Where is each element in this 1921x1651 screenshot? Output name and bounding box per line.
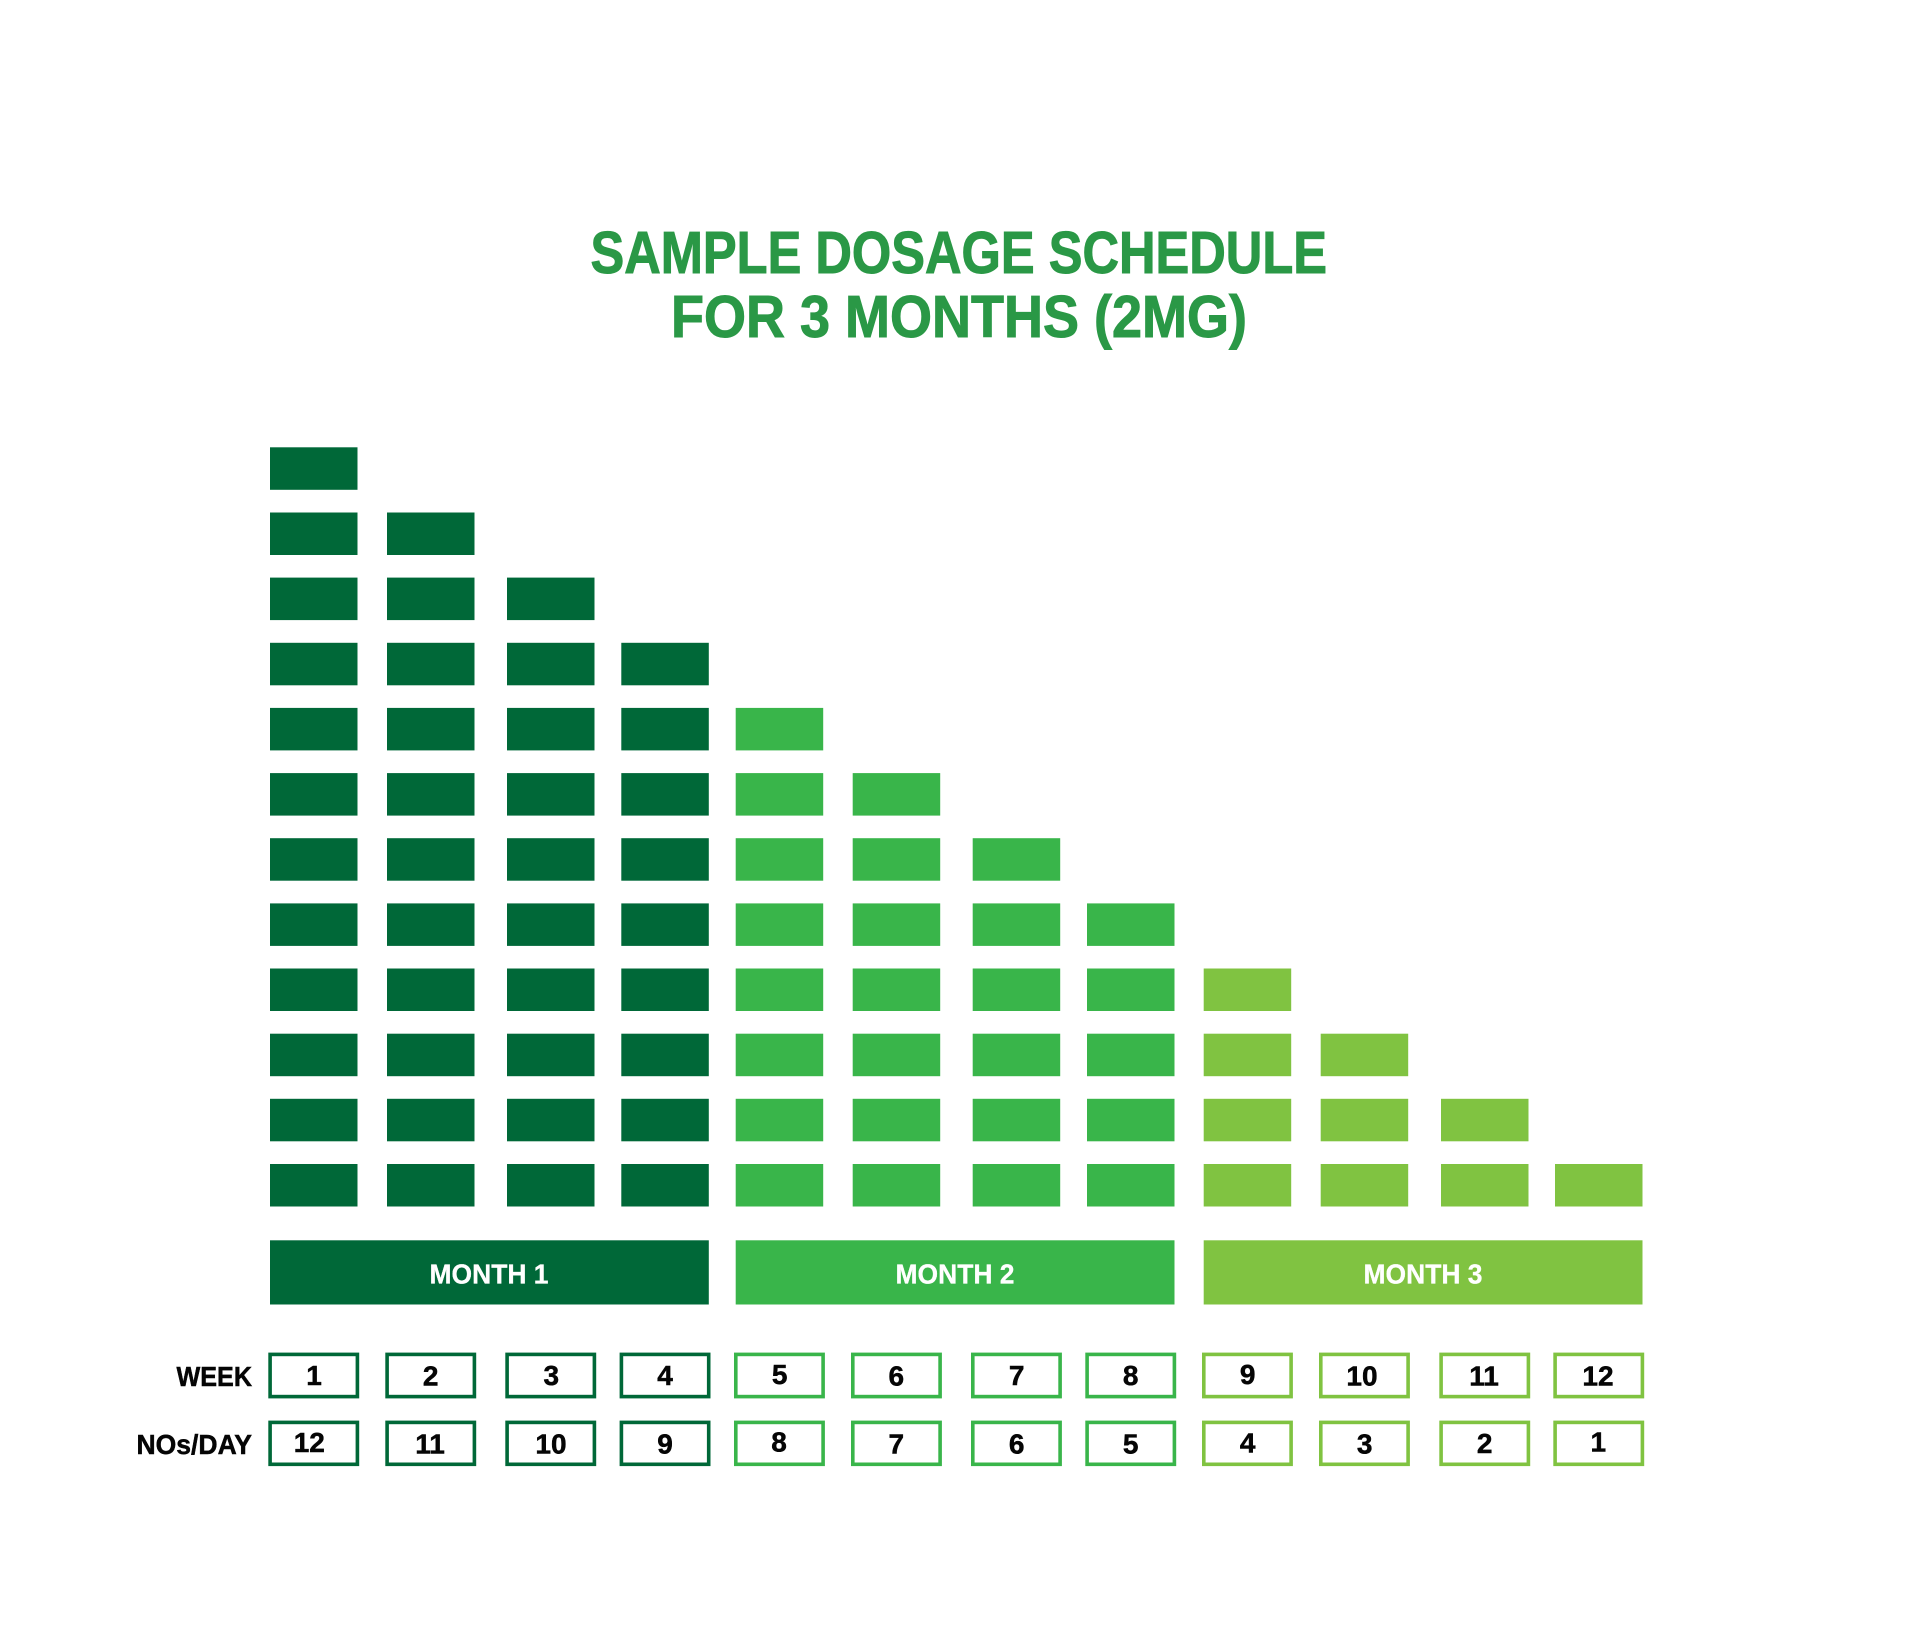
week 4 column: 9 blocks: [621, 643, 709, 1206]
numbers per day row: 9: [657, 1428, 673, 1459]
week 11 column: 2 blocks: [1441, 1099, 1528, 1206]
week number row: 11: [1469, 1360, 1499, 1392]
title: FOR 3 MONTHS (2MG): [671, 284, 1247, 350]
week 7 column: 6 blocks: [973, 838, 1060, 1206]
week number row: 7: [1009, 1360, 1024, 1391]
week number row: 8: [1123, 1360, 1138, 1391]
numbers per day row: [270, 1422, 1642, 1464]
week number row: 1: [306, 1360, 322, 1391]
week number row: 9: [1240, 1359, 1255, 1390]
row label: numbers per day: NOs/DAY: [136, 1429, 252, 1460]
month 1 banner: MONTH 1: [430, 1258, 548, 1290]
numbers per day row: 4: [1240, 1428, 1256, 1459]
week number row: 10: [1346, 1360, 1378, 1392]
week 6 column: 7 blocks: [853, 773, 940, 1206]
week 5 column: 8 blocks: [736, 708, 823, 1206]
week 9 column: 4 blocks: [1204, 968, 1291, 1206]
numbers per day row: 3: [1357, 1428, 1372, 1459]
week number row: 5: [772, 1359, 787, 1390]
month 2 banner: [736, 1240, 1174, 1304]
week number row: 2: [423, 1360, 438, 1392]
week number row: 12: [1582, 1360, 1614, 1392]
numbers per day row: 8: [771, 1427, 787, 1458]
numbers per day row: 10: [535, 1428, 567, 1459]
week 1 column: 12 blocks: [270, 447, 358, 1206]
numbers per day row: 12: [294, 1427, 325, 1458]
numbers per day row: 2: [1477, 1428, 1492, 1459]
week 10 column: 3 blocks: [1321, 1034, 1408, 1206]
month 1 banner: [270, 1240, 709, 1304]
week number row: 6: [889, 1360, 904, 1392]
week 12 column: 1 block: [1555, 1164, 1642, 1206]
numbers per day row: 1: [1591, 1427, 1606, 1458]
title: SAMPLE DOSAGE SCHEDULE: [590, 220, 1327, 286]
title: [590, 220, 1327, 350]
numbers per day row: 11: [415, 1428, 445, 1459]
week 3 column: 10 blocks: [507, 578, 594, 1206]
month 3 banner: MONTH 3: [1364, 1258, 1482, 1290]
week 2 column: 11 blocks: [387, 512, 474, 1206]
month 3 banner: [1204, 1240, 1642, 1304]
numbers per day row: 6: [1009, 1428, 1024, 1459]
row label: week: WEEK: [176, 1361, 252, 1392]
week 8 column: 5 blocks: [1087, 903, 1174, 1206]
week number row: 4: [657, 1360, 673, 1391]
numbers per day row: 7: [889, 1428, 904, 1459]
month 2 banner: MONTH 2: [896, 1258, 1014, 1290]
week number row: 3: [544, 1360, 559, 1391]
numbers per day row: 5: [1123, 1428, 1138, 1459]
week number row: [270, 1354, 1642, 1397]
bar chart: daily dose blocks by week: [270, 447, 1642, 1206]
